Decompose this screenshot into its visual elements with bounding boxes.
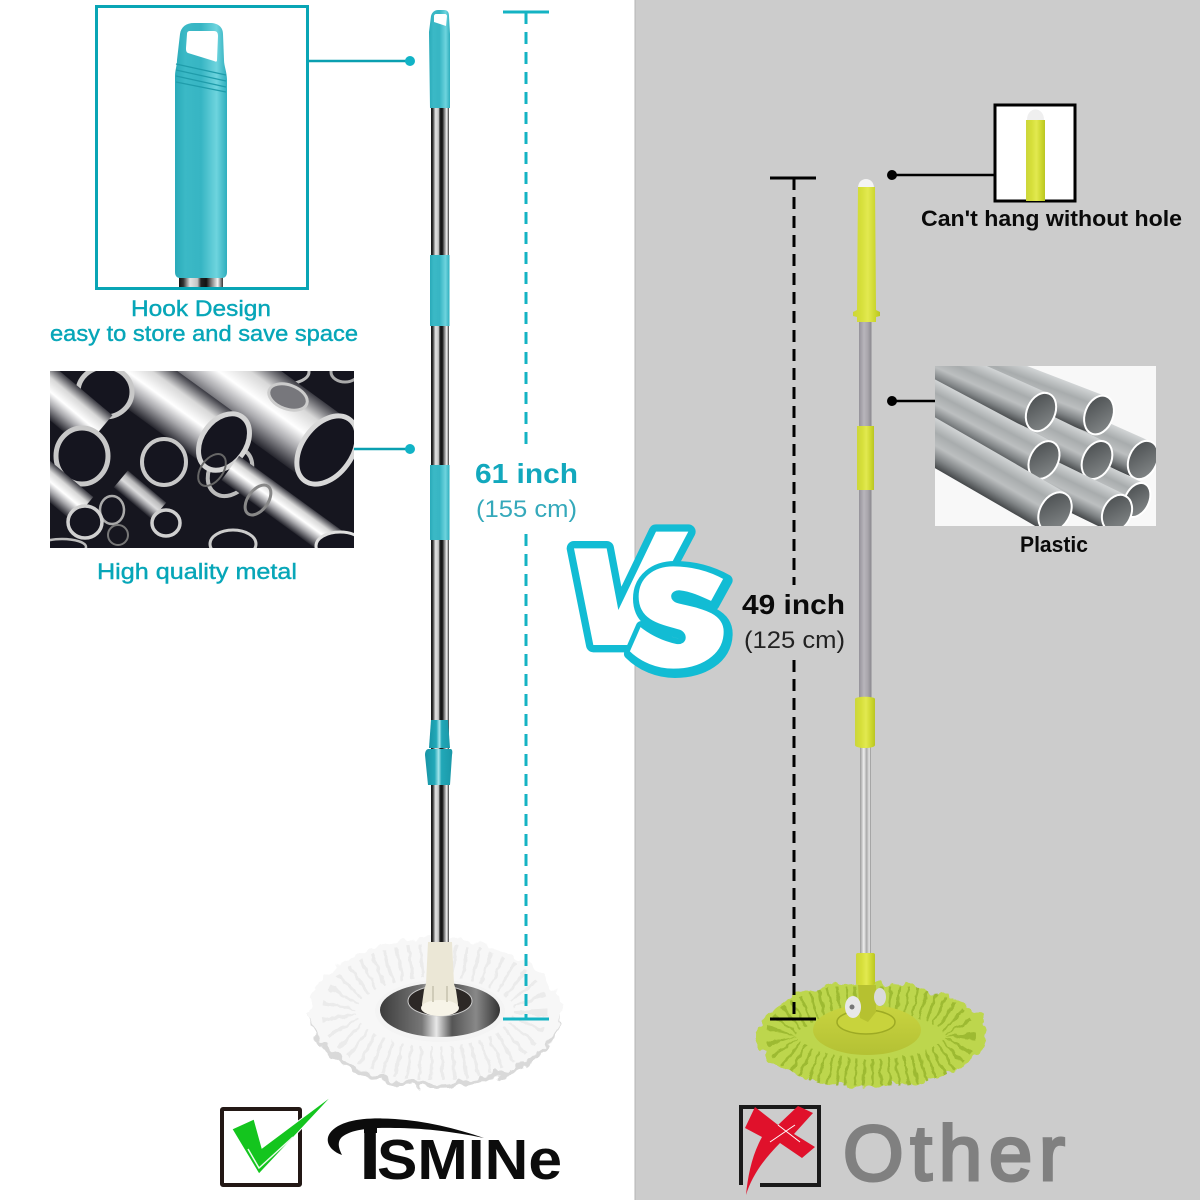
closeup box — [995, 105, 1075, 201]
connector line to grey pole — [887, 396, 936, 406]
upper sleeve — [430, 255, 450, 326]
panel: metal tubes callout — [50, 371, 415, 584]
steel tubes photo — [50, 371, 354, 548]
top hook cap — [429, 10, 450, 108]
icon: green check box — [222, 1095, 333, 1185]
hook caption — [50, 296, 358, 346]
hook caption: Hook Design — [131, 296, 271, 321]
green grip — [853, 187, 880, 322]
panel: no-hole callout — [887, 105, 1182, 231]
connector line to hook — [308, 56, 415, 66]
upper grey shaft — [859, 320, 872, 700]
steel pole — [431, 100, 449, 950]
label: 49 inch: 49 inch — [742, 589, 845, 620]
teal mop pole — [310, 10, 560, 1088]
icon: red cross box — [741, 1106, 819, 1195]
hook box frame — [96, 6, 308, 288]
letter S shadow outline — [630, 567, 727, 672]
lock collar — [425, 720, 452, 785]
plastic tubes photo — [935, 366, 1156, 526]
letter V — [574, 532, 688, 645]
white end cap — [858, 179, 874, 188]
no-hole caption: Can't hang without hole — [921, 206, 1182, 231]
background: white left side — [0, 0, 635, 1200]
label: 61 inch: 61 inch — [475, 458, 578, 489]
green mop head — [756, 983, 986, 1087]
white mop head — [310, 939, 560, 1088]
logo text: Other: Other — [843, 1109, 1065, 1197]
lower metal shaft — [860, 745, 871, 957]
label: 49 inch: (125 cm) — [744, 627, 845, 654]
panel: hook design callout — [50, 6, 415, 346]
measure: 49 inch dashed line — [770, 178, 816, 1019]
connector line to pole — [354, 444, 415, 454]
lower green sleeve — [855, 697, 875, 748]
logo: Tsmine — [328, 1118, 560, 1180]
green swivel connector — [845, 953, 886, 1022]
measure: 61 inch dashed line — [503, 12, 549, 1019]
logo: Tsmine: SMINe — [377, 1128, 562, 1192]
vs badge — [574, 532, 727, 672]
middle sleeve — [430, 465, 450, 540]
hook caption: easy to store and save space — [50, 321, 358, 346]
letter S — [628, 565, 725, 670]
plastic caption: Plastic — [1020, 532, 1088, 557]
background: grey right side — [635, 0, 1200, 1200]
zoomed hook handle — [175, 23, 227, 289]
green mop pole — [756, 179, 986, 1087]
logo: Tsmine: T — [346, 1107, 395, 1196]
upper green sleeve — [857, 426, 874, 490]
label: 61 inch — [475, 458, 578, 523]
metal caption: High quality metal — [97, 559, 297, 584]
label: 49 inch — [742, 589, 845, 654]
connector line to top cap — [887, 170, 995, 180]
neck connector — [421, 942, 459, 1016]
label: 61 inch: (155 cm) — [476, 496, 577, 523]
panel: plastic tubes callout — [887, 366, 1156, 552]
